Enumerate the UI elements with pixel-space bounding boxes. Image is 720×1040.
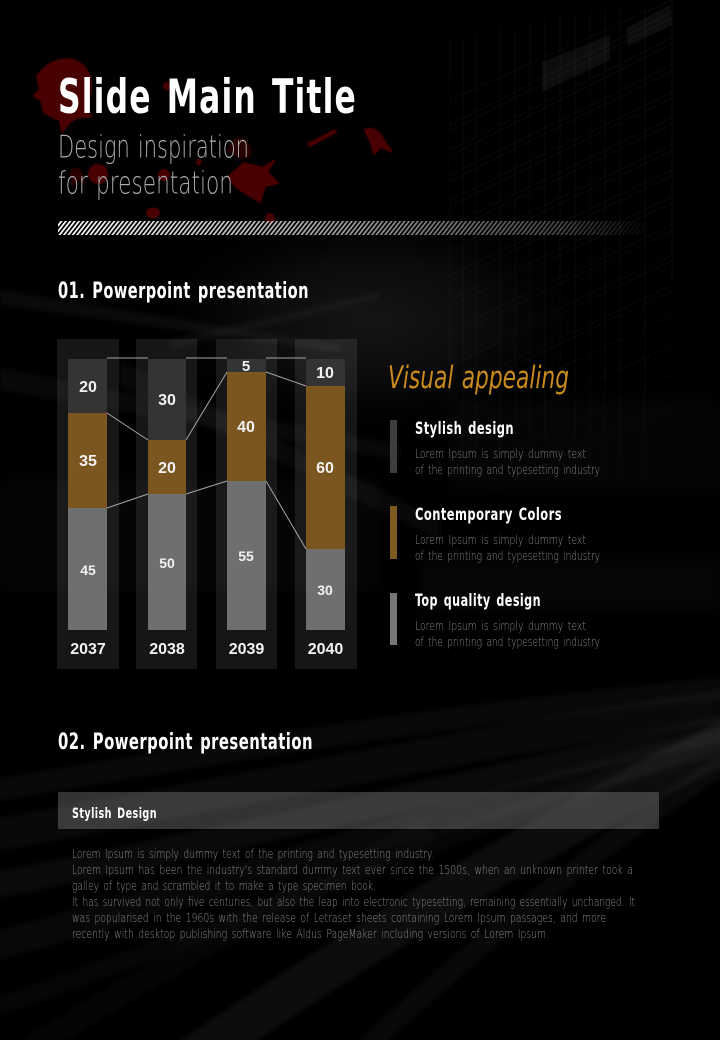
- subtitle: Design inspiration: [58, 130, 249, 166]
- subtitle: for presentation: [58, 166, 233, 202]
- column 2037: 45: [80, 562, 96, 578]
- stacked bar chart: [57, 339, 357, 669]
- banner: stylish design: [58, 792, 659, 829]
- hatched divider: [58, 221, 650, 235]
- subtitle: [58, 130, 249, 202]
- legend item: top quality design: Lorem Ipsum is simply dummy text: [415, 619, 586, 633]
- legend item: stylish design: Lorem Ipsum is simply dummy text: [415, 447, 586, 461]
- column 2039: 2039: [229, 641, 264, 658]
- column 2038: 50: [159, 555, 175, 571]
- legend item: stylish design: of the printing and typesetting industry: [415, 463, 600, 477]
- legend item: contemporary colors: [390, 505, 600, 563]
- legend item: contemporary colors: Contemporary Colors: [415, 505, 562, 525]
- heading: visual appealing: Visual appealing: [388, 360, 569, 396]
- body paragraph: recently with desktop publishing software like Aldus PageMaker including versions of Lorem Ipsum.: [72, 927, 549, 941]
- column 2040: 10: [316, 365, 334, 382]
- column 2040: 60: [316, 460, 334, 477]
- column 2037: [57, 339, 119, 669]
- column 2040: 2040: [308, 641, 343, 658]
- body paragraph: galley of type and scrambled it to make a type specimen book.: [72, 879, 376, 893]
- heading: section 01: 01. Powerpoint presentation: [58, 279, 309, 304]
- column 2039: 55: [238, 548, 254, 564]
- column 2038: [136, 339, 197, 669]
- column 2038: 30: [158, 392, 176, 409]
- heading: section 02: 02. Powerpoint presentation: [58, 730, 313, 755]
- column 2040: [295, 339, 357, 669]
- legend item: contemporary colors: of the printing and typesetting industry: [415, 549, 600, 563]
- icon: blood splatters: [34, 59, 392, 222]
- legend item: top quality design: Top quality design: [415, 591, 541, 611]
- legend item: stylish design: [390, 419, 600, 477]
- title: Slide Main Title: [58, 70, 357, 125]
- body paragraph: [72, 847, 635, 941]
- column 2037: 20: [79, 379, 97, 396]
- column 2039: [216, 339, 277, 669]
- body paragraph: Lorem Ipsum is simply dummy text of the printing and typesetting industry.: [72, 847, 434, 861]
- legend item: top quality design: of the printing and typesetting industry: [415, 635, 600, 649]
- column 2040: 30: [317, 582, 333, 598]
- column 2038: 2038: [149, 641, 185, 658]
- column 2039: 5: [242, 358, 250, 375]
- column 2037: 2037: [70, 641, 106, 658]
- column 2039: 40: [237, 419, 255, 436]
- legend item: stylish design: Stylish design: [415, 419, 514, 439]
- connector lines: [107, 358, 306, 549]
- column 2037: 35: [79, 453, 97, 470]
- column 2038: 20: [158, 460, 176, 477]
- banner: stylish design: Stylish Design: [72, 806, 157, 822]
- legend item: top quality design: [390, 591, 600, 649]
- legend item: contemporary colors: Lorem Ipsum is simply dummy text: [415, 533, 586, 547]
